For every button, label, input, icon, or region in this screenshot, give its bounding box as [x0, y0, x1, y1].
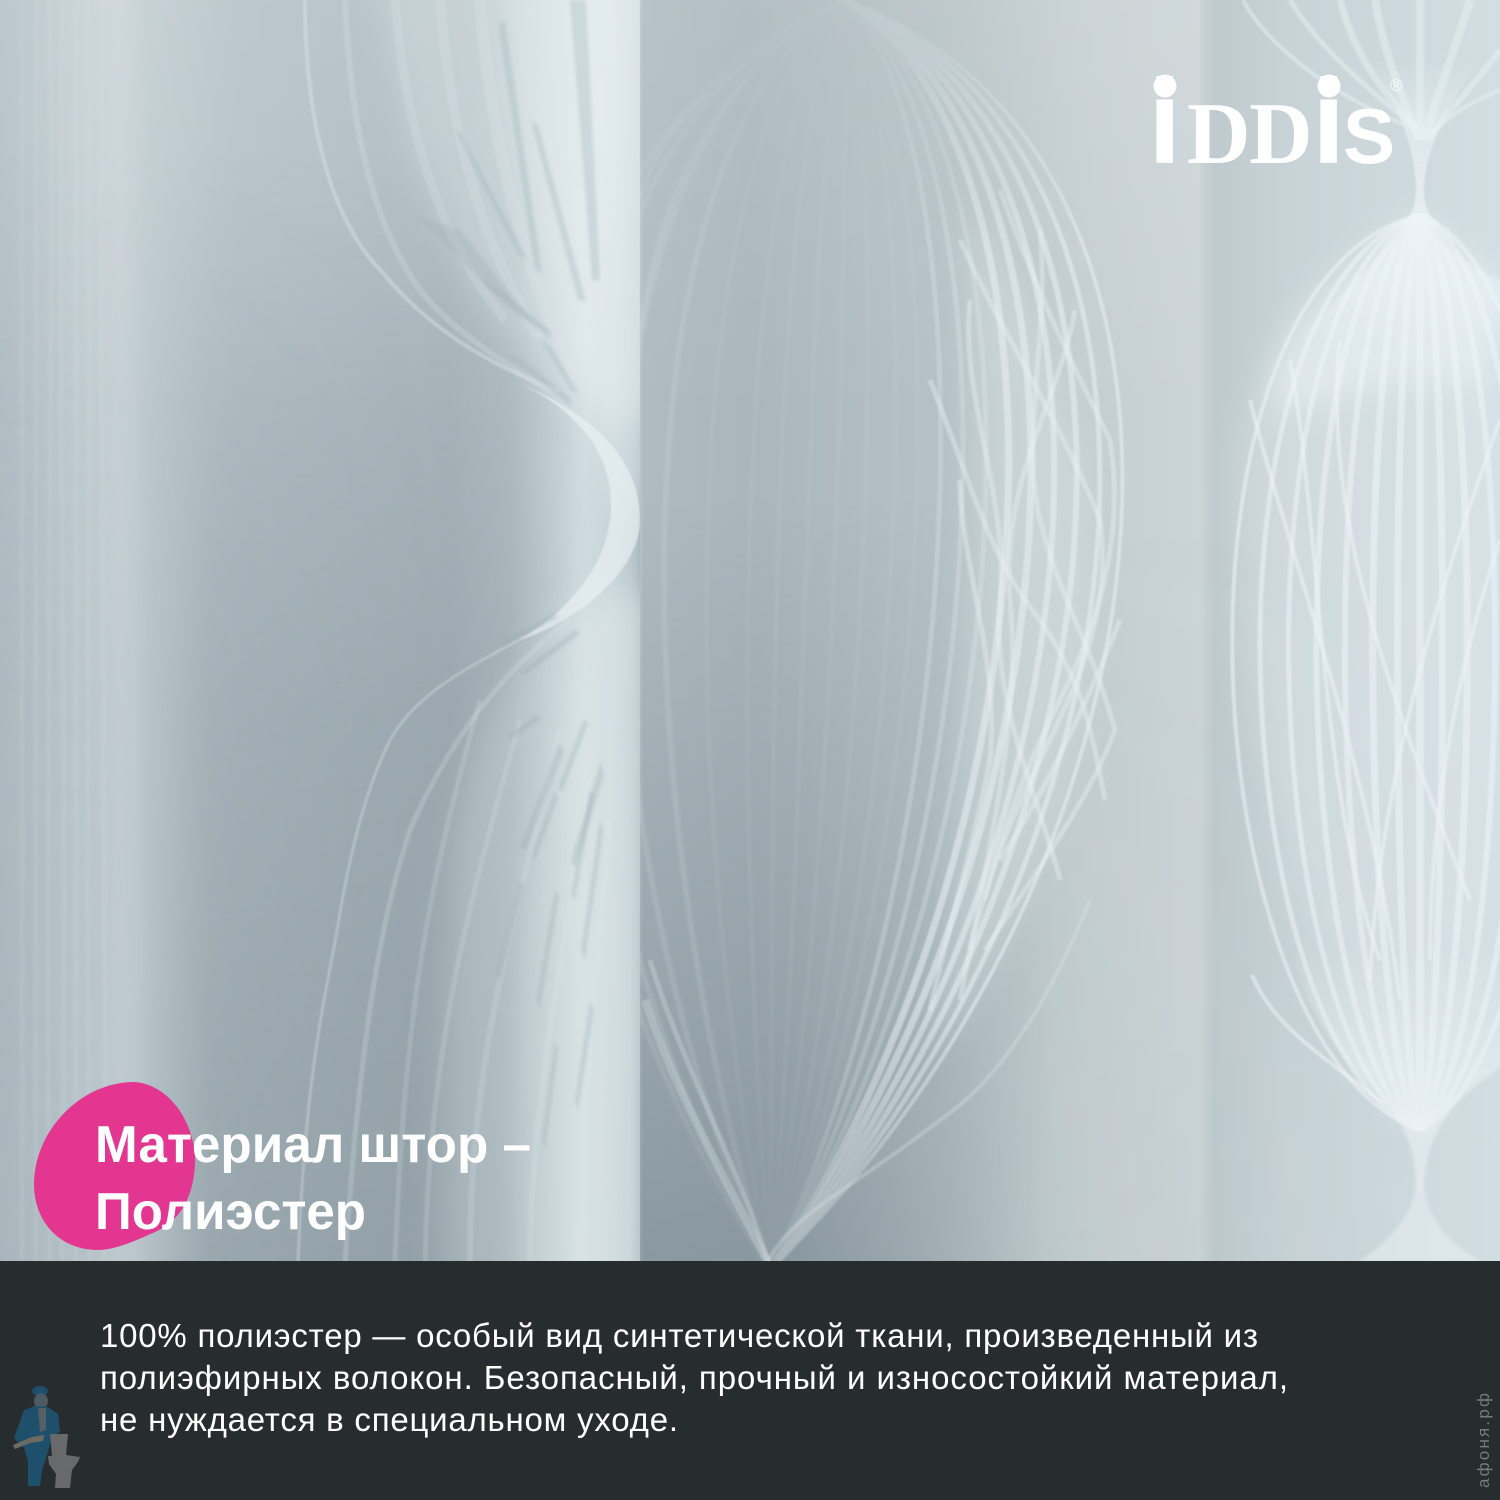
mid strands	[774, 172, 988, 1256]
crossing strands	[930, 190, 1120, 1010]
right motif: strands	[1232, 215, 1500, 1130]
logo: iDDiS: D	[1187, 86, 1251, 183]
right motif: below waist	[1358, 1188, 1482, 1262]
logo: iDDiS: S	[1343, 92, 1395, 180]
left motif	[296, 0, 640, 1261]
registered mark: ®	[1390, 76, 1403, 95]
left edge vertical stripes	[22, 0, 105, 1262]
watermark: афоня.рф	[1474, 1393, 1493, 1488]
bright strands	[770, 0, 1122, 1270]
lens edge and waist	[520, 383, 640, 640]
heading	[95, 1116, 531, 1241]
right motif: top fan	[1243, 0, 1500, 140]
right motif: lower waist mass	[1314, 1003, 1500, 1189]
heading: Материал штор –	[95, 1116, 531, 1174]
lower white mass	[436, 595, 640, 1261]
description text	[100, 1317, 1288, 1438]
pink blob	[34, 1082, 195, 1250]
lower outer curves	[296, 633, 536, 1261]
logo: iDDiS: D	[1249, 86, 1313, 183]
middle motif: oval strands	[640, 42, 1124, 1261]
logo: iDDiS: i	[1312, 55, 1345, 189]
icon: plumber with toilet	[13, 1386, 80, 1488]
logo: iDDiS: i	[1148, 55, 1181, 189]
description text: не нуждается в специальном уходе.	[100, 1401, 678, 1438]
description text: 100% полиэстер — особый вид синтетической ткани, произведенный из	[100, 1317, 1258, 1354]
bottom fan	[645, 900, 1090, 1262]
right motif: white mass	[1265, 245, 1488, 406]
bottom dark panel	[0, 1261, 1500, 1500]
logo: iDDiS	[1148, 55, 1403, 189]
faint inner strands	[706, 0, 918, 1270]
description text: полиэфирных волокон. Безопасный, прочный и износостойкий материал,	[100, 1359, 1288, 1396]
upper feather slits	[440, 0, 600, 405]
upper white mass	[388, 0, 640, 500]
right motif: upper waist	[1394, 94, 1452, 218]
lower feather slits	[496, 613, 604, 1150]
heading: Полиэстер	[95, 1183, 366, 1241]
upper outer curves	[303, 0, 553, 392]
